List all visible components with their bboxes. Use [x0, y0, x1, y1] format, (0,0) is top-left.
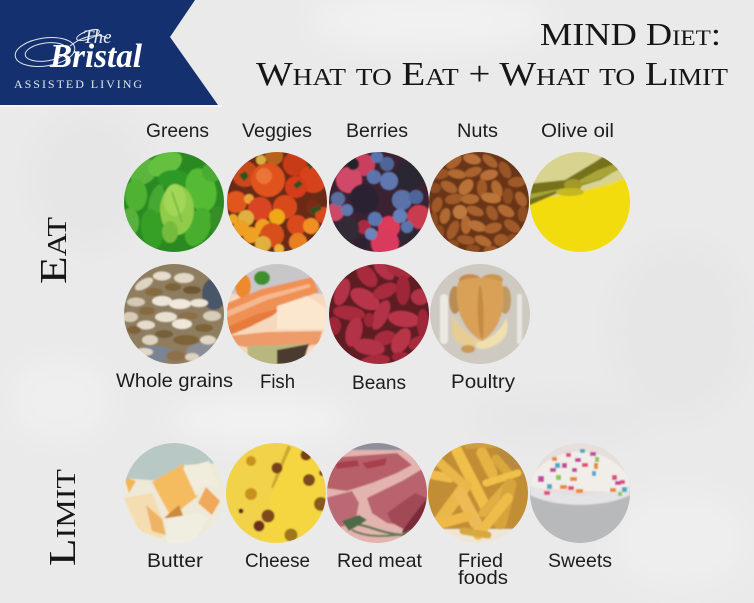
panel: foods to limit: [119, 438, 635, 589]
label: Butter: Butter: [147, 550, 204, 572]
label: Nuts: Nuts: [457, 120, 498, 142]
label: Olive oil: Olive oil: [541, 120, 614, 142]
heading: Eat: Eat: [33, 216, 75, 284]
icon: berries: [329, 152, 429, 252]
icon: beans: [329, 264, 429, 364]
logo: Bristal: Bristal: [49, 38, 143, 75]
icon: whole grains: [124, 264, 224, 364]
icon: red meat: [327, 443, 427, 543]
label: Red meat: Red meat: [337, 550, 423, 572]
icon: fish: [227, 264, 327, 364]
icon: cheese: [226, 443, 326, 543]
icon: olive oil: [530, 152, 630, 252]
label: Cheese: Cheese: [245, 550, 310, 572]
icon: nuts: [429, 152, 529, 252]
icon: greens: [124, 152, 224, 252]
label: Fried foods: [458, 550, 508, 589]
label: Whole grains: Whole grains: [116, 370, 233, 392]
label: Beans: Beans: [352, 372, 406, 394]
panel: foods to eat: [116, 120, 635, 394]
heading: Limit: Limit: [42, 468, 84, 566]
label: Sweets: Sweets: [548, 550, 612, 572]
icon: veggies: [227, 152, 327, 252]
title: [256, 16, 728, 93]
label: Fish: Fish: [260, 371, 295, 393]
title line 2: What to Eat + What to Limit: [256, 56, 728, 93]
label: Berries: Berries: [346, 120, 408, 142]
label: Veggies: Veggies: [242, 120, 312, 142]
icon: poultry: [430, 264, 530, 364]
label: Poultry: Poultry: [451, 371, 515, 393]
icon: sweets: [530, 443, 630, 543]
logo: flourish swirl: [13, 27, 108, 70]
icon: fried foods: [428, 443, 528, 543]
label: Greens: Greens: [146, 120, 209, 142]
logo: Assisted Living: ASSISTED LIVING: [14, 77, 142, 91]
banner: Bristal logo ribbon: [0, 0, 218, 105]
logo: The: The: [83, 27, 112, 48]
title line 1: MIND Diet:: [540, 16, 721, 52]
label: Fried foods: Fried: [458, 550, 503, 572]
label: Fried foods: foods: [458, 567, 508, 589]
icon: butter: [124, 443, 224, 543]
